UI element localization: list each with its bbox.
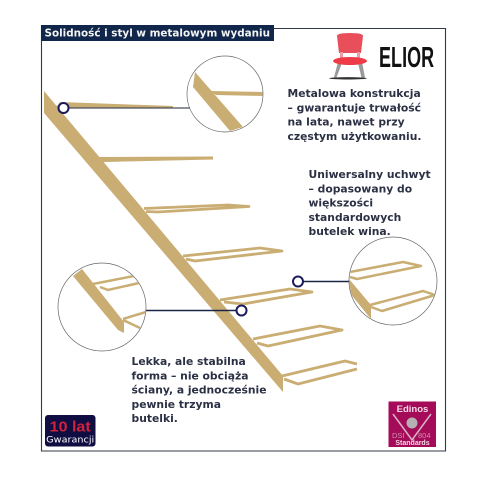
- magnifier: left joint: [58, 263, 146, 351]
- badge: 10 year warranty: 10 lat: [50, 420, 91, 436]
- text block: metal construction: częstym użytkowaniu.: [288, 130, 421, 143]
- infographic canvas: [40, 25, 446, 452]
- brand name ELIOR: ELIOR: [379, 42, 434, 74]
- magnifier: top joint: [187, 56, 263, 132]
- badge: Edinos standards: [388, 402, 436, 447]
- header title: Solidność i styl w metalowym wydaniu: [44, 28, 270, 40]
- connector: left callout: [146, 306, 246, 316]
- text block: universal holder: większości: [308, 197, 373, 210]
- connector: top callout: [58, 103, 190, 113]
- shelf 4: [183, 248, 282, 261]
- shelf 6: [253, 326, 342, 346]
- badge: Edinos standards: DSI: [392, 431, 405, 440]
- text block: universal holder: standardowych: [308, 211, 401, 224]
- icon: red chair logo: [329, 33, 367, 80]
- text block: metal construction: Metalowa konstrukcja: [288, 87, 421, 100]
- magnifier: right joint: [349, 237, 437, 325]
- text block: light but stable: pewnie trzyma: [132, 398, 221, 411]
- shelf 2: [90, 156, 213, 163]
- text block: light but stable: Lekka, ale stabilna: [132, 355, 246, 368]
- text block: metal construction: – gwarantuje trwałość: [288, 101, 421, 114]
- shelf 7: [282, 361, 357, 384]
- badge: Edinos standards: Standards: [395, 440, 430, 447]
- text block: light but stable: forma – nie obciąża: [132, 369, 248, 382]
- shelf 3: [144, 205, 249, 212]
- badge: 10 year warranty: Gwarancji: [46, 436, 94, 446]
- text block: universal holder: – dopasowany do: [308, 182, 412, 195]
- text block: light but stable: butelki.: [132, 412, 178, 425]
- badge: 10 year warranty: [45, 415, 96, 446]
- badge: Edinos standards: Edinos: [397, 404, 428, 415]
- text block: universal holder: butelek wina.: [308, 225, 391, 238]
- text block: metal construction: na lata, nawet przy: [288, 116, 405, 129]
- text block: light but stable: ściany, a jednocześnie: [132, 384, 267, 397]
- connector: right callout: [293, 276, 349, 286]
- shelf 5: [220, 289, 312, 304]
- badge: Edinos standards: 804: [418, 431, 431, 440]
- text block: universal holder: Uniwersalny uchwyt: [308, 168, 431, 181]
- wine rack: [44, 91, 357, 392]
- shelf 1: [44, 102, 173, 108]
- rack beam: [44, 91, 283, 392]
